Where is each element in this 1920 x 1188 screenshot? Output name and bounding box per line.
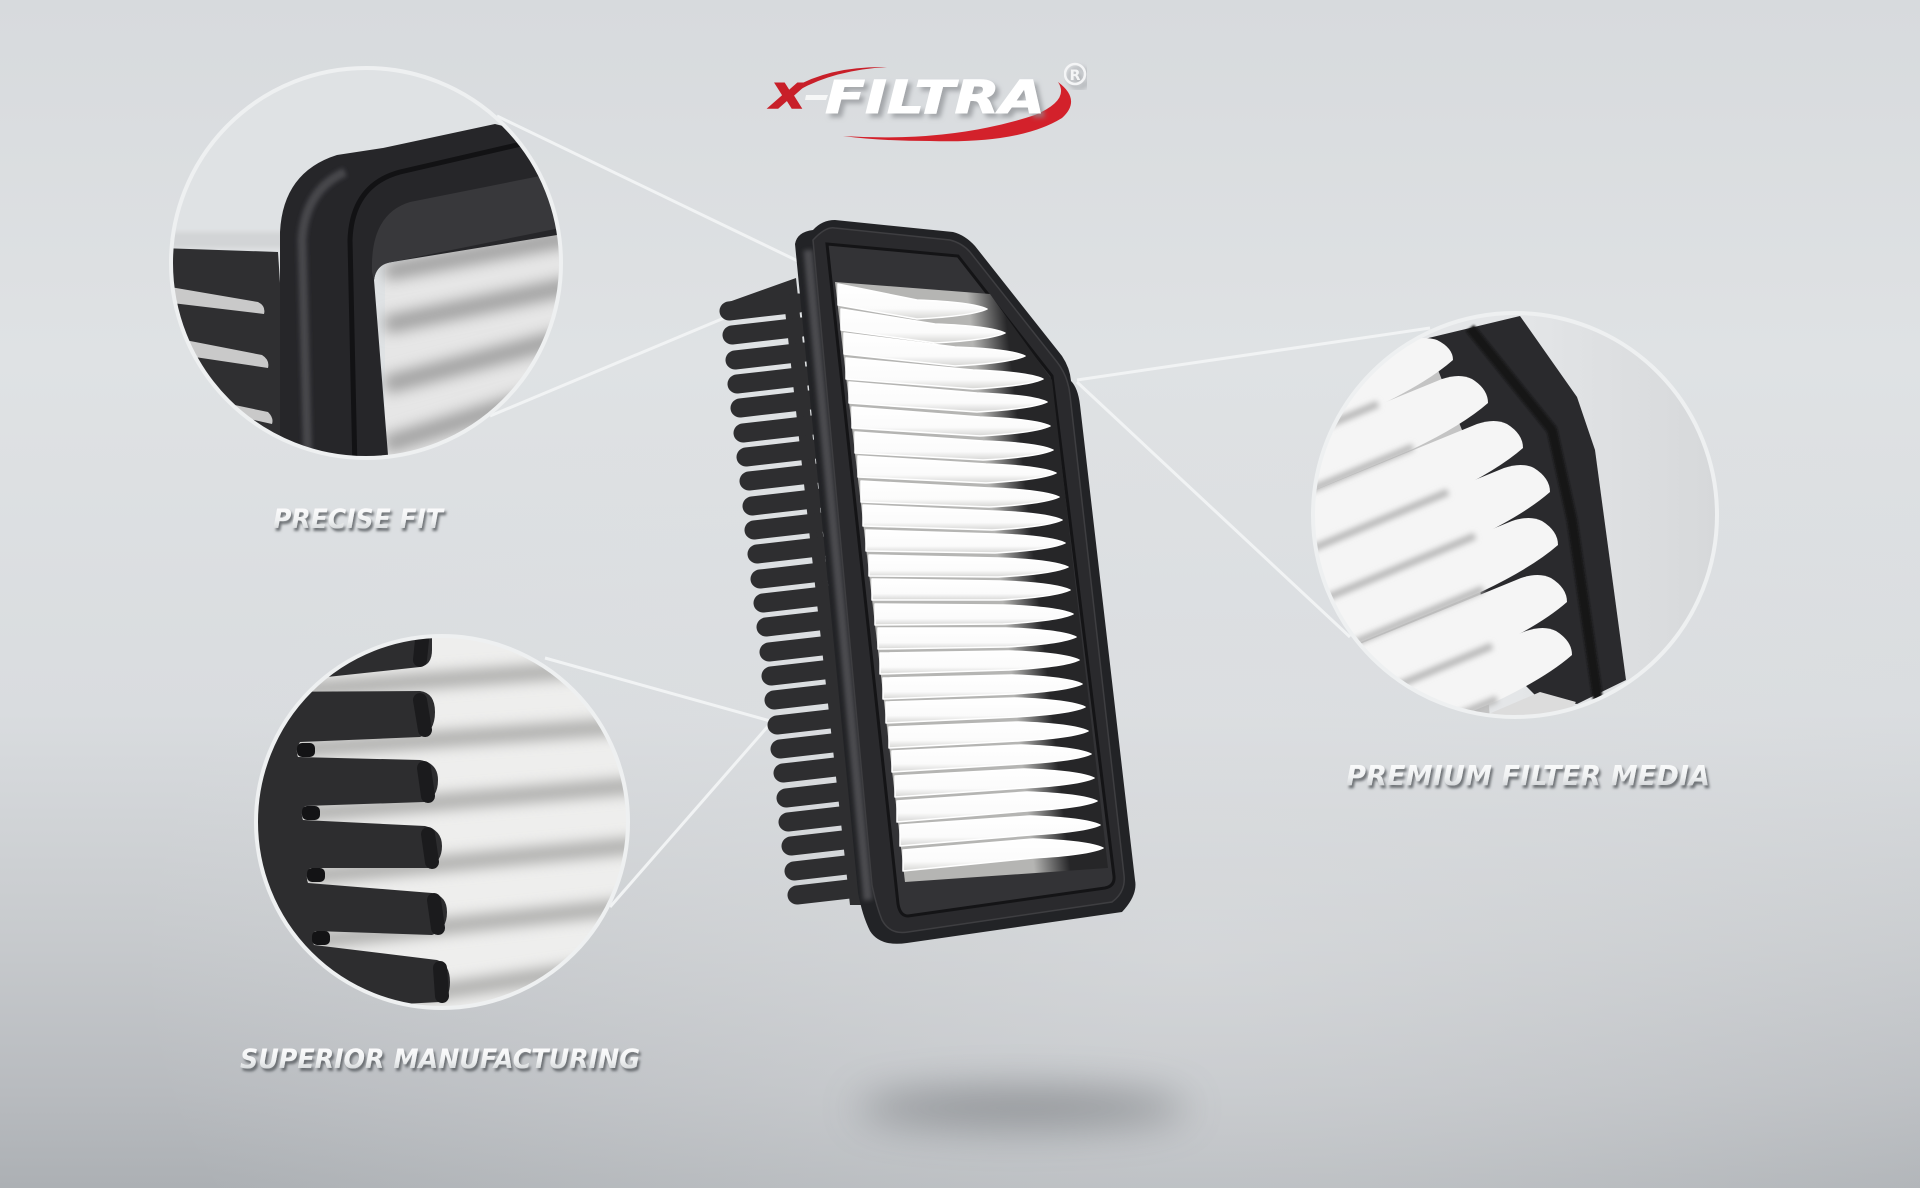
comb body (173, 248, 280, 436)
logo name: FILTRA (825, 71, 1045, 124)
frame corner (280, 124, 557, 456)
frame edge (1426, 316, 1626, 704)
connector lines: precise fit (490, 116, 802, 416)
logo dash (805, 95, 828, 100)
comb slots (170, 287, 272, 424)
pleats (1315, 338, 1572, 710)
gasket highlight (808, 250, 868, 900)
top fin (328, 638, 432, 677)
bottom pleat end (1490, 692, 1576, 715)
zoom circle: precise fit (169, 66, 563, 460)
air filter product (726, 220, 1135, 944)
inner ring (813, 228, 1124, 932)
outer frame (795, 220, 1135, 944)
slot holes (297, 743, 330, 945)
label: superior manufacturing: SUPERIOR MANUFACTURING (240, 1044, 640, 1075)
logo: X-Filtra (768, 64, 1085, 141)
zoom circle: premium filter media (1311, 311, 1719, 719)
comb fins (258, 691, 450, 1004)
connector lines: premium filter media (1077, 328, 1430, 637)
inner tray (827, 244, 1114, 916)
pleated media (838, 284, 1103, 871)
inner tray corner (372, 175, 560, 280)
gasket line (350, 142, 530, 470)
media recess (835, 282, 1108, 882)
media stripes (300, 665, 640, 1012)
registered mark: R (1070, 68, 1081, 84)
circle outline (1313, 313, 1717, 717)
fuzzy media strip (174, 232, 280, 248)
logo swoosh bottom (843, 82, 1071, 141)
connector lines: superior manufacturing (545, 658, 774, 907)
registered mark (1065, 64, 1085, 84)
fin tips (420, 640, 442, 996)
frame highlight (302, 172, 345, 470)
label: precise fit: PRECISE FIT (273, 504, 445, 535)
circle outline (256, 636, 628, 1008)
label: premium filter media: PREMIUM FILTER MEDIA (1346, 759, 1710, 792)
media shade (1318, 372, 1490, 714)
comb fins (726, 278, 867, 905)
logo swoosh top (793, 67, 887, 90)
floor shadow (857, 1088, 1187, 1128)
zoom circle: superior manufacturing (230, 630, 640, 1012)
logo X: X (768, 77, 807, 117)
media stripes (385, 228, 575, 475)
pleat shading (1316, 399, 1500, 711)
circle outline (171, 68, 561, 458)
frame groove (1470, 328, 1598, 700)
